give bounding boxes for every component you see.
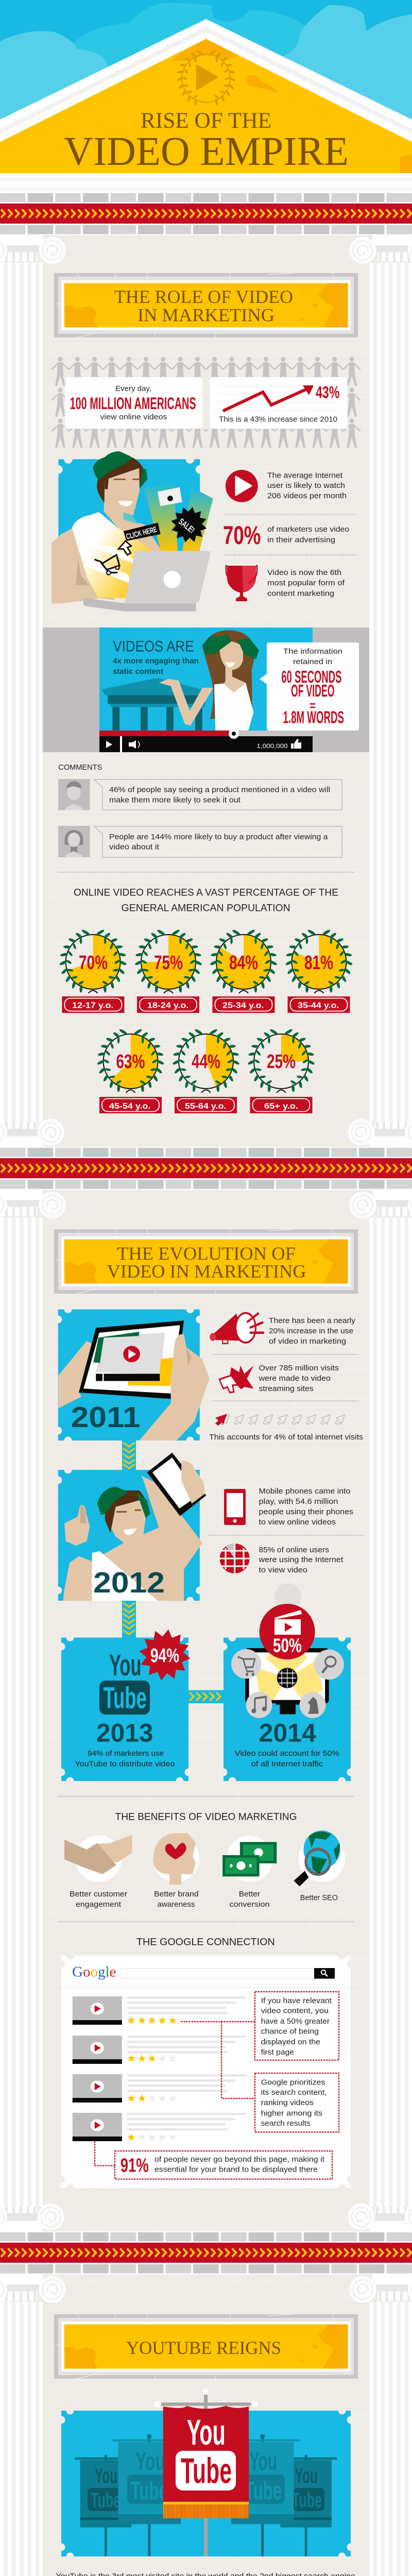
stat box: 43% line chart xyxy=(210,377,348,429)
title xyxy=(64,109,349,174)
stat: 70% of marketers xyxy=(223,521,349,550)
panel: 2014 monitor: 2014 xyxy=(259,1719,316,1748)
panel: 2013 youtube xyxy=(61,1626,194,1781)
heading plaque: the role of video in marketing xyxy=(54,273,358,337)
callout: 91% never go beyond: of people never go beyond this page, making it xyxy=(154,2156,324,2164)
illustration: man with laptop: CLICK HERE xyxy=(125,525,158,541)
divider 2 xyxy=(0,1119,412,1218)
panel: 2014 monitor: of all Internet traffic xyxy=(251,1760,323,1769)
callout: google prioritizes: ranking videos xyxy=(261,2099,314,2107)
benefit: better customer engagement: engagement xyxy=(76,1901,121,1909)
sky with clouds xyxy=(0,0,412,175)
stat box: 43% line chart: 43% xyxy=(316,383,340,402)
heading plaque: the role of video in marketing: IN MARKETING xyxy=(138,305,274,326)
benefit: better conversion: conversion xyxy=(229,1901,270,1909)
video panel: videos are 4x more engaging: 1,000,000 xyxy=(256,742,288,750)
callout: 91% never go beyond xyxy=(115,2151,332,2179)
callout: 60 seconds of video equals 1.8M words: The information xyxy=(283,648,342,656)
panel: 2014 monitor xyxy=(224,1583,351,1781)
panel: 2013 youtube: 94% of marketers use xyxy=(88,1750,164,1758)
people pattern xyxy=(52,357,360,448)
wreath 44% 55-64 xyxy=(172,1028,240,1113)
heading: google connection: THE GOOGLE CONNECTION xyxy=(136,1937,275,1947)
wreath 44% 55-64: 44% xyxy=(192,1051,220,1073)
heading plaque: evolution: THE EVOLUTION OF xyxy=(117,1243,296,1264)
google logo: Google xyxy=(72,1964,116,1980)
callout: 60 seconds of video equals 1.8M words xyxy=(260,642,359,731)
entablature xyxy=(0,173,412,193)
frieze band 1 xyxy=(0,192,412,235)
stat: 70% of marketers: 70% xyxy=(223,521,261,550)
stat: mobile phones 54.6 million: Mobile phones came into xyxy=(259,1487,350,1496)
callout: google prioritizes: Google prioritizes xyxy=(261,2079,325,2087)
callout: 60 seconds of video equals 1.8M words: OF VIDEO xyxy=(291,681,335,700)
stat: cursor burst 785 million visits: streaming sites xyxy=(259,1385,314,1393)
panel: youtube banners: You xyxy=(135,2448,165,2476)
wreath 81% 35-44: 35-44 y.o. xyxy=(298,1002,339,1010)
panel: youtube banners: Tube xyxy=(91,2488,121,2512)
stat: 206 videos per month: The average Internet xyxy=(267,471,342,480)
benefit: better conversion xyxy=(222,1836,277,1909)
stat: 85% of online users, globe pie: were using the Internet xyxy=(258,1556,343,1564)
illustration: man with laptop xyxy=(52,451,213,612)
panel: 2014 monitor: 50% xyxy=(273,1635,302,1657)
wreath 25% 65+ xyxy=(247,1028,315,1113)
panel: 2013 youtube: You xyxy=(109,1649,141,1682)
stat: trophy, 6th most popular: content marketing xyxy=(267,589,334,598)
callout: 60 seconds of video equals 1.8M words: 60 SECONDS xyxy=(281,667,341,686)
stat: cursor burst 785 million visits: Over 785 million visits xyxy=(259,1364,339,1372)
callout: 50% greater chance xyxy=(255,1992,339,2060)
panel: 2012 man with phone xyxy=(58,1453,207,1601)
heading plaque: the role of video in marketing: THE ROLE OF VIDEO xyxy=(114,286,293,307)
panel: youtube banners: Tube xyxy=(245,2477,282,2505)
stat: 85% of online users, globe pie: 85% of online users xyxy=(259,1546,329,1554)
callout: 50% greater chance: chance of being xyxy=(261,2028,319,2036)
panel: 2013 youtube: Tube xyxy=(103,1682,147,1715)
callout: 60 seconds of video equals 1.8M words: retained in xyxy=(293,658,332,666)
stat: cursor burst 785 million visits xyxy=(219,1364,339,1393)
benefit: better customer engagement: Better customer xyxy=(70,1890,127,1899)
illustration: man with laptop: SALE! xyxy=(177,517,197,535)
panel: 2014 monitor: Video could account for 50% xyxy=(235,1750,339,1758)
icon: gold laurel with play button xyxy=(176,49,236,106)
wreath 75% 18-24: 75% xyxy=(154,952,183,974)
callout: 50% greater chance: have a 50% greater xyxy=(261,2018,330,2026)
heading plaque: evolution xyxy=(54,1229,358,1294)
video panel: videos are 4x more engaging: static content xyxy=(113,667,163,676)
wreath 70% 12-17: 70% xyxy=(79,952,108,974)
comments: 46% of people say seeing a product mentioned in a video will xyxy=(109,786,330,794)
wreath 81% 35-44 xyxy=(285,929,353,1013)
panel: youtube banners: You xyxy=(249,2448,277,2476)
stat: 206 videos per month: 206 videos per month xyxy=(267,492,347,500)
heading: online video reaches: ONLINE VIDEO REACHES A VAST PERCENTAGE OF THE xyxy=(74,887,338,899)
comments: make them more likely to seek it out xyxy=(109,796,241,804)
wreath 70% 12-17 xyxy=(59,929,127,1013)
benefit: better SEO: Better SEO xyxy=(300,1894,338,1902)
comments xyxy=(58,764,342,857)
wreath 63% 45-54: 45-54 y.o. xyxy=(109,1102,150,1111)
callout: 50% greater chance: video content, you xyxy=(261,2007,329,2015)
divider 3 xyxy=(0,2204,412,2303)
panel: google search results xyxy=(61,1956,351,2188)
stat: trophy, 6th most popular: most popular form of xyxy=(267,579,345,587)
stat: 85% of online users, globe pie xyxy=(219,1544,343,1574)
panel: 2013 youtube: YouTube to distribute video xyxy=(75,1760,175,1769)
stat: 206 videos per month xyxy=(226,470,347,502)
benefit: better SEO xyxy=(294,1831,345,1902)
stat: megaphone 20% increase: of video in marketing xyxy=(269,1337,346,1346)
callout: google prioritizes: search results xyxy=(261,2120,311,2128)
video panel: videos are 4x more engaging: 4x more engaging than xyxy=(113,656,199,665)
panel: 2012 man with phone: 2012 xyxy=(93,1566,165,1599)
callout: 50% greater chance: displayed on the xyxy=(261,2038,320,2046)
stat: trophy, 6th most popular: Video is now the 6th xyxy=(267,569,341,577)
benefit: better brand awareness: Better brand xyxy=(154,1890,199,1899)
heading: online video reaches: GENERAL AMERICAN POPULATION xyxy=(122,903,290,914)
callout: 91% never go beyond: essential for your brand to be displayed there xyxy=(154,2166,318,2174)
heading plaque: youtube reigns: YOUTUBE REIGNS xyxy=(126,2337,281,2358)
stat box: 100 million americans: Every day, xyxy=(115,385,151,393)
panel: youtube banners: Tube xyxy=(181,2450,232,2490)
stat box: 43% line chart: This is a 43% increase since 2010 xyxy=(219,416,337,424)
wreath 81% 35-44: 81% xyxy=(304,952,333,974)
wreath 84% 25-34: 84% xyxy=(229,952,258,974)
stat: mobile phones 54.6 million: people using their phones xyxy=(259,1508,353,1516)
callout: 60 seconds of video equals 1.8M words: = xyxy=(310,699,316,713)
heading plaque: youtube reigns xyxy=(54,2314,358,2379)
wreath 63% 45-54: 63% xyxy=(116,1051,145,1073)
stat: 70% of marketers: in their advertising xyxy=(267,536,335,544)
wreath 25% 65+: 65+ y.o. xyxy=(264,1102,298,1111)
stat: 85% of online users, globe pie: to view video xyxy=(259,1566,307,1574)
wreath 63% 45-54 xyxy=(97,1028,165,1113)
stat: trophy, 6th most popular xyxy=(226,566,345,601)
panel: 2011 tablet: 2011 xyxy=(71,1401,141,1434)
panel: youtube banners: Tube xyxy=(131,2477,168,2505)
benefit: better conversion: Better xyxy=(239,1890,260,1899)
stat box: 100 million americans: view online videos xyxy=(100,413,167,421)
wreath 44% 55-64: 55-64 y.o. xyxy=(185,1102,226,1111)
comments: People are 144% more likely to buy a product after viewing a xyxy=(109,833,329,841)
title: RISE OF THE xyxy=(141,109,271,133)
stat: mobile phones 54.6 million: to view online videos xyxy=(259,1518,336,1527)
comments: video about it xyxy=(109,843,159,852)
arrow: connector 2013 to 2014 xyxy=(188,1690,224,1703)
stat: 70% of marketers: of marketers use video xyxy=(267,526,349,534)
panel: 2013 youtube: 2013 xyxy=(96,1719,153,1748)
capitals top xyxy=(0,235,412,264)
callout: google prioritizes: its search content, xyxy=(261,2089,327,2097)
stat: megaphone 20% increase xyxy=(210,1313,356,1346)
callout: google prioritizes xyxy=(255,2073,339,2132)
wreath 25% 65+: 25% xyxy=(267,1051,296,1073)
panel: youtube banners: Tube xyxy=(292,2488,322,2512)
panel: youtube banners: You xyxy=(95,2464,117,2487)
video panel: videos are 4x more engaging: VIDEOS ARE xyxy=(113,638,194,655)
panel: youtube banners xyxy=(61,2388,351,2556)
comments: COMMENTS xyxy=(58,764,102,772)
stat box: 100 million americans xyxy=(65,377,202,429)
callout: 60 seconds of video equals 1.8M words: 1.8M WORDS xyxy=(283,708,344,727)
stat: cursor burst 785 million visits: were made to video xyxy=(258,1375,331,1383)
callout: 50% greater chance: If you have relevant xyxy=(261,1997,332,2005)
panel: 2011 tablet xyxy=(58,1310,210,1440)
benefit: better customer engagement xyxy=(64,1835,132,1909)
stat: 206 videos per month: user is likely to watch xyxy=(267,482,345,490)
heading plaque: evolution: VIDEO IN MARKETING xyxy=(107,1261,306,1282)
arrow: connector 2012 to 2013 xyxy=(122,1601,136,1638)
callout: 91% never go beyond: 91% xyxy=(121,2155,149,2177)
pictogram: 4% of internet visits xyxy=(209,1414,363,1442)
title: VIDEO EMPIRE xyxy=(64,129,349,174)
stat: megaphone 20% increase: There has been a nearly xyxy=(269,1317,356,1325)
wreath 70% 12-17: 12-17 y.o. xyxy=(72,1002,113,1010)
panel: youtube banners: You xyxy=(187,2412,226,2452)
heading: benefits: THE BENEFITS OF VIDEO MARKETING xyxy=(115,1811,297,1823)
video panel: videos are 4x more engaging xyxy=(43,628,369,752)
heading: online video reaches xyxy=(74,887,338,914)
panel: 2013 youtube: 94% xyxy=(150,1645,179,1667)
benefit: better brand awareness: awareness xyxy=(158,1901,195,1909)
stat: mobile phones 54.6 million: play, with 54.6 million xyxy=(259,1498,338,1506)
arrow: connector 2011 to 2012 xyxy=(122,1440,136,1474)
wreath 84% 25-34 xyxy=(210,929,278,1013)
callout: 50% greater chance: first page xyxy=(261,2048,294,2057)
benefit: better brand awareness xyxy=(153,1833,199,1909)
stat: megaphone 20% increase: 20% increase in the use xyxy=(269,1327,353,1335)
roof pediment xyxy=(0,19,412,173)
panel: youtube banners: You xyxy=(295,2464,318,2487)
callout: google prioritizes: higher among its xyxy=(261,2109,322,2117)
wreath 84% 25-34: 25-34 y.o. xyxy=(222,1002,264,1010)
pictogram: 4% of internet visits: This accounts for 4% of total internet visits xyxy=(209,1433,363,1442)
wreath 75% 18-24: 18-24 y.o. xyxy=(147,1002,188,1010)
stat: mobile phones 54.6 million xyxy=(224,1487,353,1527)
stat box: 100 million americans: 100 MILLION AMERICANS xyxy=(70,394,196,413)
wreath 75% 18-24 xyxy=(134,929,202,1013)
